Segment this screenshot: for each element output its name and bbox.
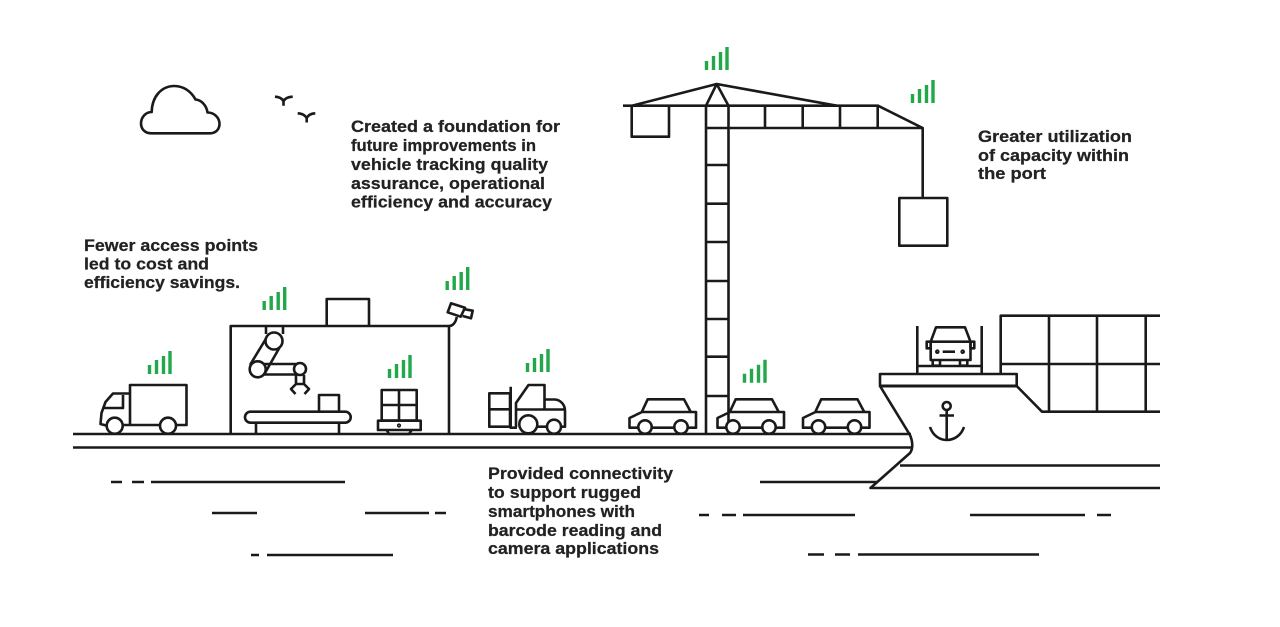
icon: anchor [930, 402, 964, 440]
signal: car [744, 360, 765, 383]
signal: truck [150, 351, 170, 374]
text: access points: Fewer access points [84, 236, 258, 255]
icon: forklift [489, 385, 565, 434]
signal: forklift [528, 349, 548, 372]
text: access points [84, 236, 258, 292]
text: foundation for improvements: assurance, operational [351, 174, 545, 193]
text: rugged smartphones: camera applications [488, 539, 659, 558]
building [231, 299, 449, 434]
icon: car 3 [803, 399, 870, 434]
signal: pallet [390, 355, 410, 378]
text: foundation for improvements: future improvements in [351, 136, 536, 155]
icon: car on ship [917, 326, 982, 374]
icon: car 2 [718, 399, 784, 434]
quay ground lines [73, 434, 912, 448]
icon: cloud [141, 86, 220, 133]
icon: robot arm [250, 326, 309, 394]
crane [623, 84, 947, 434]
signal: crane right [912, 80, 933, 103]
text: access points: efficiency savings. [84, 273, 240, 292]
text: capacity utilization: of capacity within [978, 146, 1129, 165]
icon: truck [100, 385, 186, 434]
text: capacity utilization: the port [978, 164, 1046, 183]
text: foundation for improvements: efficiency and accuracy [351, 192, 553, 212]
text: rugged smartphones: Provided connectivity [488, 464, 674, 483]
icon: birds [275, 97, 315, 122]
text: capacity utilization: Greater utilization [978, 127, 1132, 146]
text: rugged smartphones: barcode reading and [488, 521, 662, 540]
text: rugged smartphones: smartphones with [488, 502, 635, 521]
signal: robot [264, 287, 285, 310]
conveyor with box [245, 395, 351, 434]
text: access points: led to cost and [84, 254, 209, 274]
signal: crane top [706, 47, 727, 70]
icon: security camera [448, 303, 473, 326]
water dashes [111, 482, 1111, 555]
icon: pallet on robot cart [378, 390, 421, 434]
text: foundation for improvements: vehicle tracking quality [351, 155, 549, 174]
text: foundation for improvements: Created a foundation for [351, 117, 560, 136]
text: rugged smartphones [488, 464, 674, 558]
text: capacity utilization [978, 127, 1132, 183]
text: foundation for improvements [351, 117, 560, 212]
icon: car 1 [630, 399, 696, 434]
text: rugged smartphones: to support rugged [488, 483, 641, 502]
ship hull and containers [870, 316, 1160, 488]
signal: camera [447, 267, 468, 290]
